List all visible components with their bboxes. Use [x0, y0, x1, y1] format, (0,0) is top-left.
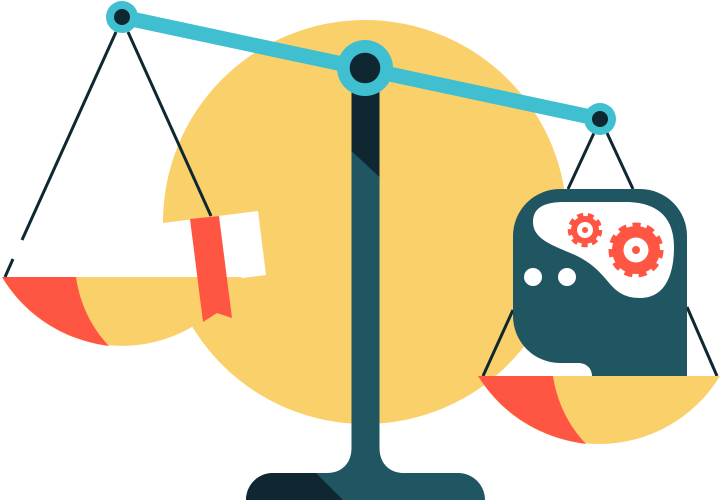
balance beam — [122, 17, 600, 119]
right pivot — [584, 103, 616, 135]
left pivot — [106, 1, 138, 33]
left pan ropes — [5, 32, 211, 277]
open book white page — [163, 211, 266, 278]
base shadow — [246, 473, 343, 500]
head silhouette — [513, 189, 687, 376]
brain area — [533, 202, 674, 298]
post shadow — [352, 80, 380, 177]
right pan — [478, 376, 720, 444]
left pan — [2, 277, 242, 346]
background yellow circle — [163, 20, 567, 424]
right pan red section — [478, 376, 586, 444]
centre pivot — [337, 40, 393, 96]
left pan red section — [2, 277, 109, 346]
right pan ropes — [483, 133, 717, 376]
large gear — [611, 225, 661, 275]
central post and base — [246, 80, 485, 500]
bookmark ribbon — [190, 216, 232, 322]
eye dots — [524, 268, 576, 286]
small gear — [570, 215, 600, 245]
